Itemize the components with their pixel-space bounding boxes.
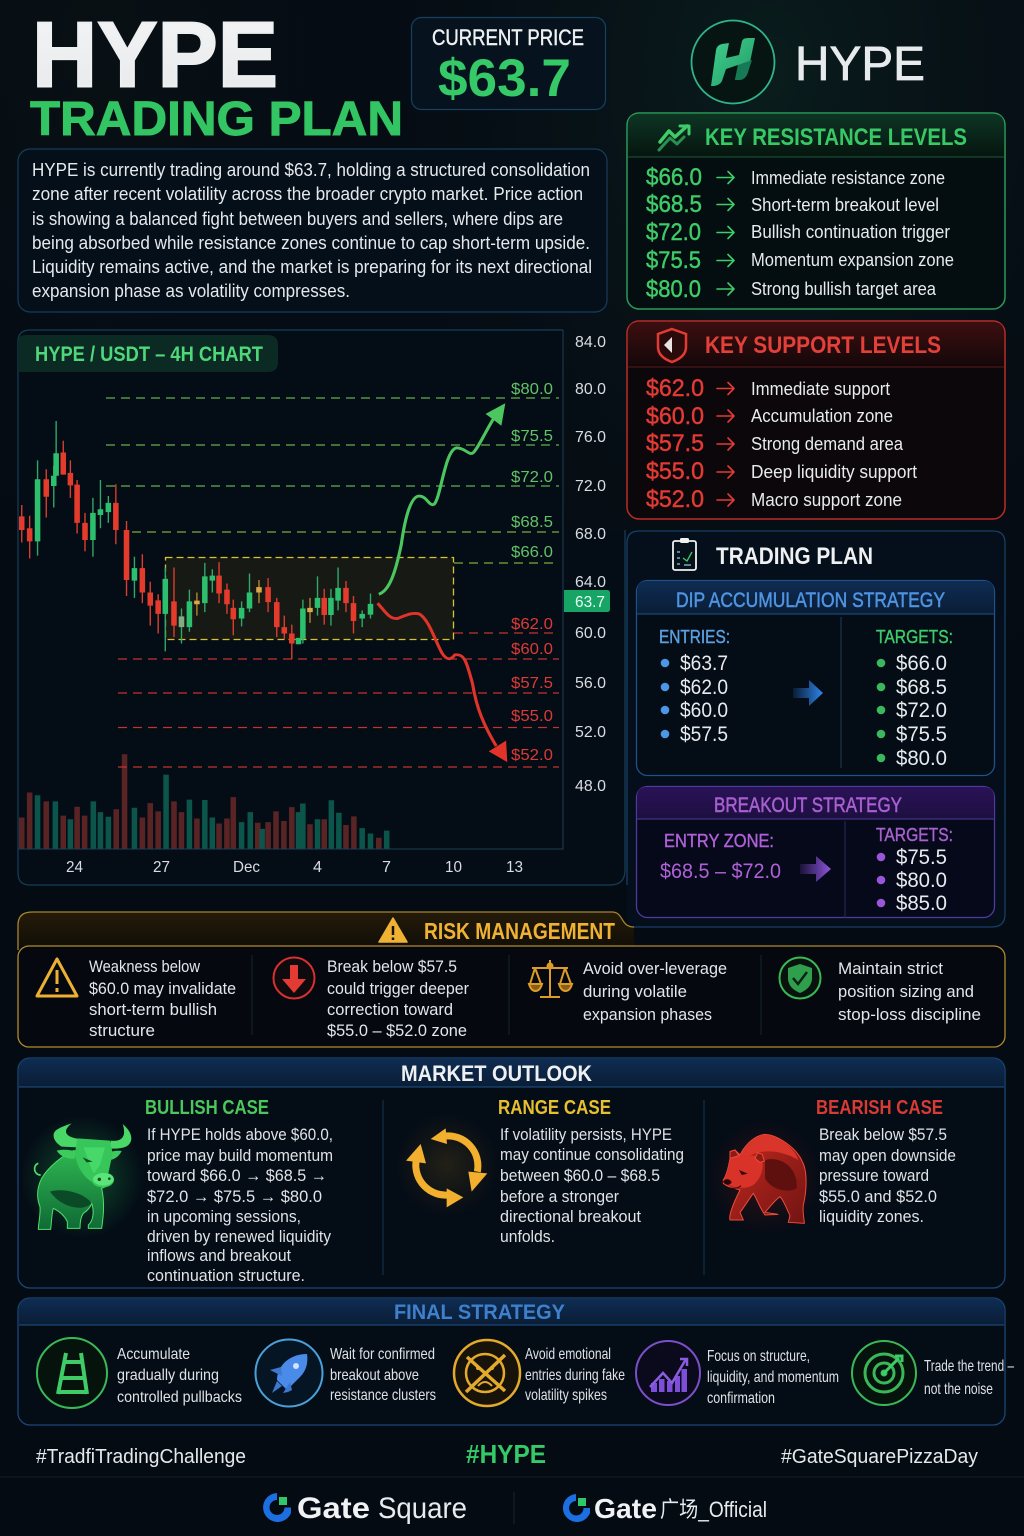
risk item 2: could trigger deeper: [327, 979, 469, 998]
risk item 1: [37, 957, 236, 1040]
risk item 2: Break below $57.5: [327, 957, 457, 976]
icon: rising chart arrows: [659, 126, 689, 150]
hashtags: #TradfiTradingChallenge: [36, 1446, 246, 1468]
entry zone: [660, 831, 781, 883]
HYPE logo: [692, 20, 925, 104]
resistance rows: $75.5: [646, 247, 701, 274]
strategy 4: liquidity, and momentum: [707, 1369, 839, 1386]
price axis: 84.0: [575, 334, 606, 351]
panel: risk management: [18, 912, 1005, 1047]
level labels: $60.0: [511, 641, 553, 658]
panel: risk management: RISK MANAGEMENT: [424, 918, 615, 944]
strategy 1: Accumulate: [117, 1346, 190, 1363]
risk item 2: $55.0 – $52.0 zone: [327, 1021, 467, 1040]
resistance rows: Immediate resistance zone: [751, 168, 945, 188]
targets list: $72.0: [896, 699, 947, 722]
strategy 3: entries during fake: [525, 1367, 625, 1384]
range case: before a stronger: [500, 1187, 619, 1206]
bearish projection arrow: [378, 603, 507, 762]
strategy 2: resistance clusters: [330, 1387, 436, 1404]
strategy 5: [852, 1341, 1014, 1405]
strategy 2: Wait for confirmed: [330, 1346, 435, 1363]
bullish case: $72.0 → $75.5 → $80.0: [147, 1187, 322, 1206]
footer: Gate official handle: 广场_Official: [660, 1497, 767, 1522]
support rows: $62.0: [646, 375, 704, 402]
icon: growth chart: [636, 1341, 700, 1405]
bullish case: If HYPE holds above $60.0,: [147, 1125, 333, 1144]
price axis: 52.0: [575, 724, 606, 741]
bearish case: may open downside: [819, 1146, 956, 1165]
level labels: $66.0: [511, 544, 553, 561]
bullish case: price may build momentum: [147, 1146, 333, 1165]
level labels: $62.0: [511, 616, 553, 633]
icon: warning triangle: [37, 959, 77, 996]
risk item 3: expansion phases: [583, 1005, 712, 1024]
current price badge: [564, 590, 610, 612]
level labels: $57.5: [511, 675, 553, 692]
strategy 4: Focus on structure,: [707, 1348, 810, 1365]
intro text panel: [18, 149, 607, 312]
resistance level lines: [106, 398, 559, 563]
footer: Gate official handle: [563, 1493, 767, 1524]
icon: shield: [658, 329, 686, 362]
chart heading tab: HYPE / USDT – 4H CHART: [35, 343, 263, 366]
risk item 4: position sizing and: [838, 982, 974, 1001]
entries list: $57.5: [680, 723, 728, 746]
icon: bear: [707, 1120, 823, 1236]
intro text panel: Liquidity remains active, and the market is preparing for its next directional: [32, 256, 592, 277]
bearish case: BEARISH CASE: [816, 1097, 943, 1119]
resistance rows: [646, 164, 954, 303]
footer: Gate Square logo: Square: [378, 1492, 467, 1525]
current price box: CURRENT PRICE: [432, 25, 584, 50]
icon: down arrow: [274, 958, 314, 998]
panel: trading plan: TRADING PLAN: [716, 543, 873, 570]
bullish projection arrow: [379, 403, 505, 594]
breakout targets: $85.0: [896, 892, 947, 915]
targets list: $68.5: [896, 676, 947, 699]
icon: cycle arrows: [395, 1113, 499, 1217]
panel: final strategy: [18, 1298, 1014, 1425]
strategy 3: [454, 1340, 625, 1406]
price axis: 64.0: [575, 574, 606, 591]
chart heading tab: [18, 335, 278, 372]
panel: chart: [18, 330, 625, 885]
icon: Gate mark: [263, 1493, 291, 1522]
intro text panel: expansion phase as volatility compresses.: [32, 280, 350, 301]
price axis: 56.0: [575, 675, 606, 692]
targets list: $66.0: [896, 652, 947, 675]
price axis: [575, 334, 606, 795]
bullish case: BULLISH CASE: [145, 1097, 269, 1119]
level labels: $72.0: [511, 469, 553, 486]
strategy 4: confirmation: [707, 1390, 775, 1407]
intro text panel: is showing a balanced fight between buyers and sellers, where dips are: [32, 208, 563, 229]
panel: market outlook: MARKET OUTLOOK: [401, 1061, 593, 1086]
icon: crossed emotion: [454, 1340, 520, 1406]
support rows: $57.5: [646, 430, 704, 457]
strategy 1: gradually during: [117, 1367, 219, 1384]
support rows: Strong demand area: [751, 434, 904, 454]
panel: final strategy: FINAL STRATEGY: [394, 1300, 565, 1324]
hashtags: #HYPE: [466, 1439, 546, 1469]
resistance rows: $68.5: [646, 191, 702, 218]
support rows: $60.0: [646, 403, 704, 430]
candlesticks: [22, 421, 370, 659]
icon: check shield: [780, 958, 820, 998]
entries list: ENTRIES:: [659, 627, 730, 647]
icon: target: [852, 1341, 916, 1405]
icon: Gate mark: [563, 1494, 590, 1522]
bullish case: [20, 1097, 333, 1285]
targets list: [876, 627, 953, 770]
price axis: 48.0: [575, 778, 606, 795]
date axis: 4: [313, 859, 322, 876]
targets list: $80.0: [896, 747, 947, 770]
icon: ladder: [37, 1338, 107, 1408]
bearish case: Break below $57.5: [819, 1125, 947, 1144]
resistance rows: Short-term breakout level: [751, 195, 939, 215]
range case: unfolds.: [500, 1227, 555, 1246]
entry zone: $68.5 – $72.0: [660, 860, 781, 883]
risk item 4: stop-loss discipline: [838, 1005, 981, 1024]
resistance rows: Strong bullish target area: [751, 279, 937, 299]
targets list: TARGETS:: [876, 627, 953, 647]
consolidation zone: [166, 558, 454, 640]
bullish case: continuation structure.: [147, 1266, 305, 1285]
hashtags: #GateSquarePizzaDay: [781, 1446, 978, 1468]
resistance rows: Momentum expansion zone: [751, 250, 954, 270]
bearish case: liquidity zones.: [819, 1207, 924, 1226]
title: [30, 2, 403, 146]
risk item 3: Avoid over-leverage: [583, 959, 727, 978]
range case: may continue consolidating: [500, 1145, 684, 1164]
bearish case: [707, 1097, 956, 1236]
icon: rocket: [256, 1340, 322, 1406]
support rows: Macro support zone: [751, 490, 902, 510]
date axis: 24: [66, 859, 83, 876]
strategy 5: not the noise: [924, 1381, 993, 1398]
level labels: $80.0: [511, 381, 553, 398]
icon: bull: [20, 1115, 144, 1239]
title: TRADING PLAN: [30, 93, 403, 146]
volume bars: [22, 754, 387, 849]
panel: key support levels: [627, 321, 1005, 519]
support rows: [646, 375, 917, 513]
range case: directional breakout: [500, 1207, 641, 1226]
current price box: $63.7: [438, 49, 571, 108]
strategy 1: controlled pullbacks: [117, 1389, 242, 1406]
panel: key support levels: KEY SUPPORT LEVELS: [705, 332, 941, 359]
bearish case: pressure toward: [819, 1166, 929, 1185]
entries list: $62.0: [680, 676, 728, 699]
bullish case: inflows and breakout: [147, 1246, 291, 1265]
price axis: 68.0: [575, 526, 606, 543]
intro text panel: zone after recent volatility across the broader crypto market. Price action: [32, 183, 583, 204]
strategy 2: [256, 1340, 436, 1406]
panel: market outlook: [18, 1058, 1005, 1288]
risk item 3: [529, 959, 727, 1024]
sub-panel: dip accumulation strategy: DIP ACCUMULATION STRATEGY: [676, 589, 945, 612]
breakout targets: $75.5: [896, 846, 947, 869]
title: HYPE: [32, 2, 278, 106]
resistance rows: $80.0: [646, 276, 701, 303]
range case: If volatility persists, HYPE: [500, 1125, 672, 1144]
strategy 2: breakout above: [330, 1367, 419, 1384]
price axis: 80.0: [575, 381, 606, 398]
panel: trading plan: [627, 531, 1005, 927]
arrow: entries to targets: [793, 680, 823, 706]
strategy 3: Avoid emotional: [525, 1346, 611, 1363]
footer: Gate Square logo: Gate: [297, 1492, 370, 1525]
level labels: $55.0: [511, 708, 553, 725]
intro text panel: being absorbed while resistance zones continue to cap short-term upside.: [32, 232, 590, 253]
support rows: $52.0: [646, 486, 704, 513]
price axis: 76.0: [575, 429, 606, 446]
intro text panel: HYPE is currently trading around $63.7, holding a structured consolidation: [32, 159, 590, 180]
price axis: 72.0: [575, 478, 606, 495]
arrow: entry to targets: [800, 856, 831, 882]
risk item 1: $60.0 may invalidate: [89, 979, 236, 998]
level labels: $75.5: [511, 428, 553, 445]
strategy 3: volatility spikes: [525, 1387, 607, 1404]
sub-panel: dip accumulation strategy: [636, 580, 994, 776]
panel: key resistance levels: KEY RESISTANCE LEVELS: [705, 124, 967, 151]
HYPE logo: HYPE: [795, 38, 925, 91]
date axis: 10: [445, 859, 462, 876]
strategy 4: [636, 1341, 839, 1407]
sub-panel: breakout strategy: BREAKOUT STRATEGY: [714, 794, 902, 817]
bullish case: driven by renewed liquidity: [147, 1227, 332, 1246]
footer: Gate Square logo: [263, 1492, 467, 1525]
panel: key resistance levels: [627, 113, 1005, 309]
risk item 4: Maintain strict: [838, 959, 943, 978]
risk item 3: during volatile: [583, 982, 687, 1001]
support level lines: [118, 633, 559, 767]
breakout targets: $80.0: [896, 869, 947, 892]
range case: RANGE CASE: [498, 1097, 611, 1119]
support rows: $55.0: [646, 458, 704, 485]
hashtags: [36, 1439, 978, 1469]
sub-panel: breakout strategy: [636, 786, 994, 918]
level labels: $68.5: [511, 514, 553, 531]
resistance rows: $72.0: [646, 219, 701, 246]
entries list: $63.7: [680, 652, 728, 675]
bearish case: $55.0 and $52.0: [819, 1187, 937, 1206]
breakout targets: TARGETS:: [876, 825, 953, 845]
risk item 1: short-term bullish: [89, 1000, 217, 1019]
icon: warning heading: [379, 918, 407, 942]
date axis: 7: [382, 859, 391, 876]
resistance rows: Bullish continuation trigger: [751, 222, 950, 242]
support rows: Deep liquidity support: [751, 462, 917, 482]
targets list: $75.5: [896, 723, 947, 746]
level labels: [511, 381, 553, 764]
entries list: [659, 627, 730, 746]
bullish case: in upcoming sessions,: [147, 1207, 301, 1226]
risk item 1: Weakness below: [89, 957, 201, 976]
support rows: Accumulation zone: [751, 406, 893, 426]
support rows: Immediate support: [751, 379, 890, 399]
level labels: $52.0: [511, 747, 553, 764]
range case: [395, 1097, 684, 1246]
date axis: Dec: [233, 859, 260, 876]
risk item 2: [274, 957, 469, 1040]
footer: Gate official handle: Gate: [594, 1493, 657, 1524]
entries list: $60.0: [680, 699, 728, 722]
strategy 1: [37, 1338, 242, 1408]
entry zone: ENTRY ZONE:: [664, 831, 774, 851]
date axis: 13: [506, 859, 523, 876]
bullish case: toward $66.0 → $68.5 →: [147, 1166, 327, 1185]
breakout targets: [876, 825, 953, 915]
risk item 2: correction toward: [327, 1000, 453, 1019]
current price box: [412, 18, 606, 110]
resistance rows: $66.0: [646, 164, 702, 191]
icon: clipboard: [673, 538, 696, 570]
risk item 1: structure: [89, 1021, 155, 1040]
date axis: 27: [153, 859, 170, 876]
price axis: 60.0: [575, 625, 606, 642]
date axis: [66, 859, 523, 876]
risk item 4: [780, 958, 981, 1024]
range case: between $60.0 – $68.5: [500, 1166, 660, 1185]
current price badge: 63.7: [575, 594, 605, 611]
icon: balance scales: [529, 960, 572, 997]
